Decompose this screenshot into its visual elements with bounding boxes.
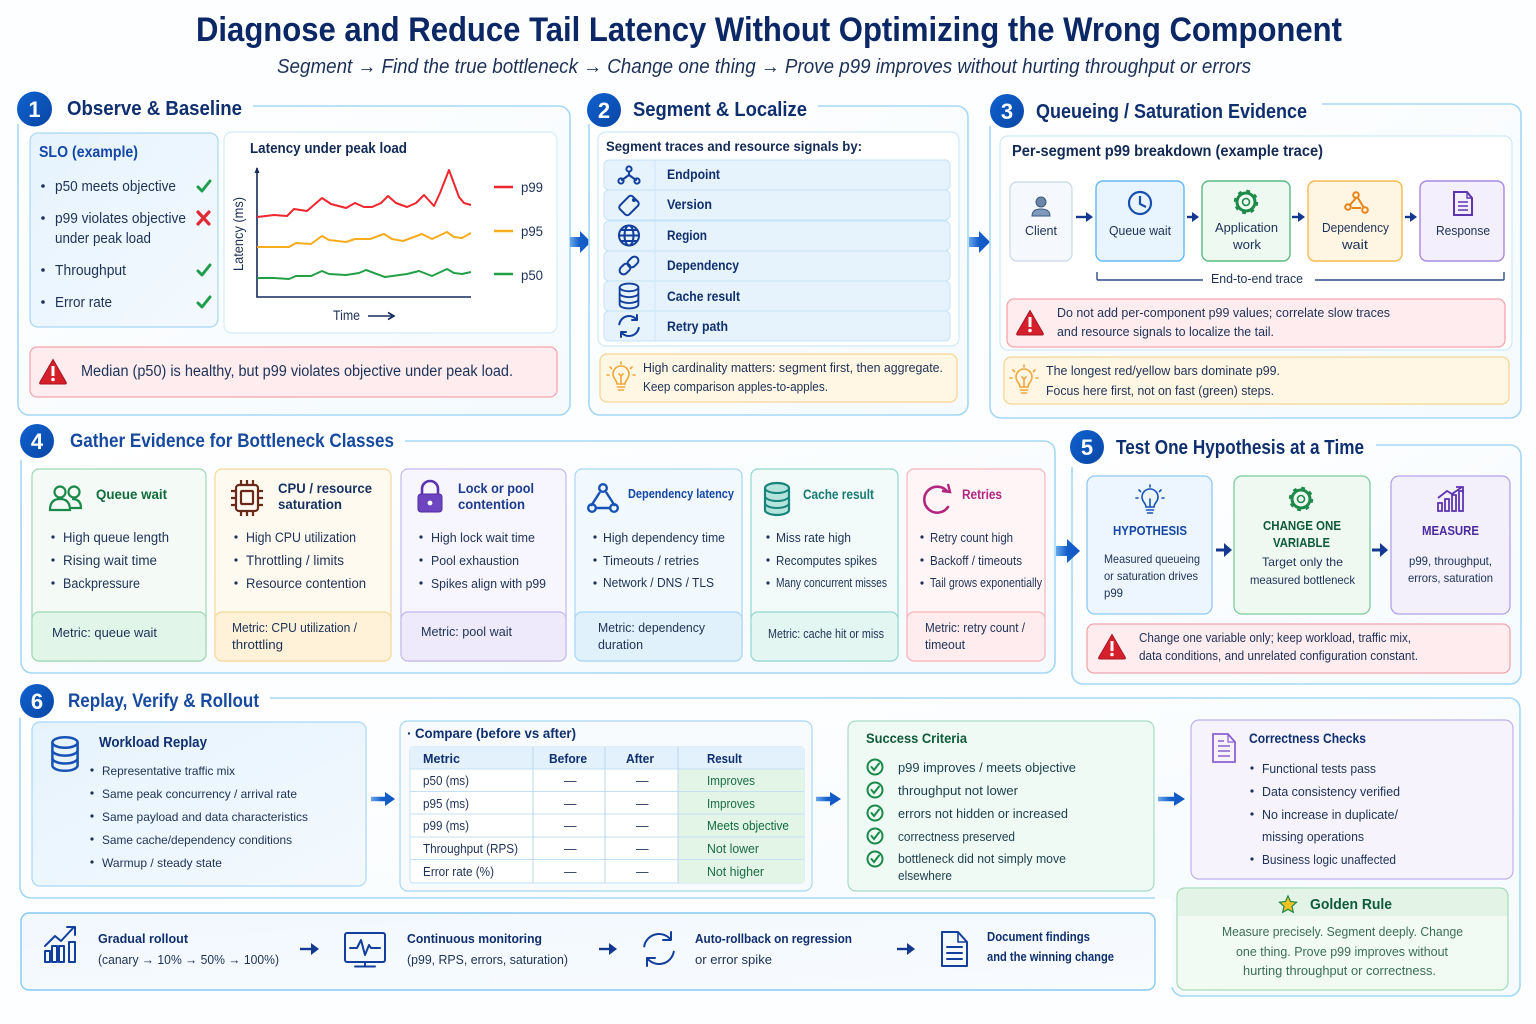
bracket: end-to-end trace: End-to-end trace — [1211, 271, 1303, 286]
card: correctness checks — [1191, 720, 1513, 879]
line chart: latency under peak load — [224, 132, 557, 333]
compare table — [400, 721, 812, 891]
card: success criteria: bottleneck did not simply move — [898, 851, 1066, 866]
card: workload replay: Same cache/dependency conditions — [102, 833, 292, 847]
compare table: · — [407, 725, 412, 741]
card: queue wait: Queue wait — [96, 487, 167, 502]
badge 5 — [1070, 430, 1104, 464]
card: correctness checks: missing operations — [1262, 830, 1364, 844]
card: lock or pool contention: contention — [458, 497, 525, 512]
segmentation table — [598, 132, 959, 346]
card: cache result: Recomputes spikes — [776, 554, 877, 568]
card: correctness checks: Correctness Checks — [1249, 730, 1366, 746]
card: retries — [907, 469, 1045, 661]
compare table: — — [636, 865, 649, 879]
card: measure: p99, throughput, — [1409, 554, 1492, 568]
tip: high cardinality: Keep comparison apples-to-apples. — [643, 379, 828, 394]
card: queue wait: Metric: queue wait — [52, 625, 157, 640]
card: success criteria: throughput not lower — [898, 783, 1019, 798]
step: client — [1010, 182, 1072, 261]
compare table: p50 (ms) — [423, 774, 469, 788]
step: dependency wait — [1308, 181, 1402, 261]
compare table: Not lower — [707, 842, 759, 856]
compare table: Compare (before vs after) — [415, 725, 576, 741]
alert: median healthy: Median (p50) is healthy, but p99 violates objective under peak load. — [81, 363, 513, 380]
card: measure: MEASURE — [1422, 523, 1479, 538]
heading: segment and localize: Segment & Localize — [633, 99, 807, 121]
alert: change one variable only: Change one variable only; keep workload, traffic mix, — [1139, 631, 1411, 645]
subtitle: Segment → Find the true bottleneck → Change one thing → Prove p99 improves without hurting throughput or errors — [277, 56, 1251, 78]
card: queue wait: High queue length — [63, 530, 169, 545]
step: queue wait: Queue wait — [1109, 223, 1171, 238]
panel: 3 queueing and saturation evidence — [990, 94, 1521, 418]
panel: 5 test one hypothesis — [1070, 430, 1521, 684]
row: retry path — [604, 311, 950, 341]
step: continuous monitoring: (p99, RPS, errors, saturation) — [407, 952, 568, 967]
badge 3: 3 — [1001, 99, 1013, 124]
card: dependency latency: High dependency time — [603, 530, 725, 545]
card: golden rule — [1177, 888, 1508, 990]
step: auto-rollback: Auto-rollback on regression — [695, 931, 852, 946]
compare table: — — [636, 842, 649, 856]
segmentation table: Segment traces and resource signals by: — [606, 138, 862, 154]
card: queue wait — [32, 469, 206, 661]
card: queue wait: Backpressure — [63, 576, 140, 591]
step: gradual rollout: (canary → 10% → 50% → 100%) — [98, 952, 279, 967]
card: cpu saturation: Metric: CPU utilization / — [232, 620, 357, 635]
step: document findings — [942, 929, 1114, 966]
step: continuous monitoring: Continuous monitoring — [407, 931, 542, 946]
SLO card: p50 meets objective — [55, 179, 176, 195]
row: endpoint: Endpoint — [667, 167, 720, 182]
card: cache result: Metric: cache hit or miss — [768, 627, 884, 641]
row: cache result: Cache result — [667, 289, 740, 304]
step: client: Client — [1025, 223, 1057, 238]
SLO card: Error rate — [55, 295, 112, 311]
card: workload replay: Warmup / steady state — [102, 856, 222, 870]
card: workload replay: Same peak concurrency / arrival rate — [102, 787, 297, 801]
compare table: p99 (ms) — [423, 819, 469, 833]
heading: observe and baseline: Observe & Baseline — [67, 98, 242, 120]
compare table: — — [564, 819, 577, 833]
card: change one variable — [1234, 476, 1370, 614]
trace breakdown: Per-segment p99 breakdown (example trace) — [1012, 143, 1323, 160]
line chart: latency under peak load: p50 — [521, 267, 543, 283]
compare table: — — [564, 842, 577, 856]
card: success criteria: p99 improves / meets objective — [898, 760, 1076, 775]
SLO card: Throughput — [55, 263, 126, 279]
card: retries: Metric: retry count / — [925, 620, 1025, 635]
badge 5: 5 — [1081, 435, 1093, 460]
rollout bar — [21, 913, 1155, 990]
card: retries: Tail grows exponentially — [930, 576, 1043, 590]
panel: 2 segment and localize — [587, 93, 968, 415]
badge 6 — [20, 684, 54, 718]
trace breakdown — [1000, 136, 1512, 350]
heading: queueing and saturation: Queueing / Saturation Evidence — [1036, 101, 1307, 123]
card: cache result — [751, 469, 898, 661]
panel: 4 gather evidence — [20, 424, 1055, 673]
card: dependency latency — [575, 469, 742, 661]
arrow: step 4 to 5 — [1056, 539, 1080, 563]
card: dependency latency: Network / DNS / TLS — [603, 575, 714, 590]
card: dependency latency: Dependency latency — [628, 487, 734, 501]
compare table: Metric — [423, 752, 460, 766]
row: region: Region — [667, 228, 707, 243]
card: cpu saturation: saturation — [278, 497, 342, 512]
card: golden rule: hurting throughput or correctness. — [1243, 963, 1436, 978]
step: gradual rollout: Gradual rollout — [98, 931, 189, 946]
row: dependency — [604, 251, 950, 281]
card: change one variable: CHANGE ONE — [1263, 518, 1341, 533]
arrow: compare to success — [816, 792, 841, 806]
card: workload replay: Workload Replay — [99, 735, 207, 751]
card: retries: Backoff / timeouts — [930, 554, 1022, 568]
step: gradual rollout — [45, 927, 279, 967]
compare table: — — [564, 797, 577, 811]
tip: high cardinality — [600, 354, 957, 402]
tip: longest bars — [1004, 357, 1509, 404]
alert: do not add p99: Do not add per-component p99 values; correlate slow traces — [1057, 305, 1390, 320]
compare table: — — [564, 774, 577, 788]
card: change one variable: measured bottleneck — [1250, 573, 1356, 587]
line chart: latency under peak load: p95 — [521, 223, 543, 239]
compare table: — — [636, 819, 649, 833]
card: lock or pool contention: Pool exhaustion — [431, 553, 519, 568]
badge 3 — [990, 94, 1024, 128]
step: continuous monitoring — [345, 931, 568, 967]
step: response — [1420, 181, 1504, 261]
tip: high cardinality: High cardinality matters: segment first, then aggregate. — [643, 360, 943, 375]
card: workload replay: Same payload and data characteristics — [102, 810, 308, 824]
card: cache result: Cache result — [803, 487, 874, 502]
alert: do not add p99 — [1007, 299, 1505, 347]
row: dependency: Dependency — [667, 258, 739, 273]
card: cache result: Miss rate high — [776, 531, 851, 545]
card: change one variable: Target only the — [1262, 555, 1343, 569]
card: cpu saturation — [215, 469, 391, 661]
step: dependency wait: Dependency — [1322, 220, 1389, 235]
arrow: step 1 to 2 — [570, 231, 591, 253]
line chart: latency under peak load: Latency under peak load — [250, 141, 407, 157]
step: auto-rollback: or error spike — [695, 952, 772, 967]
line chart: latency under peak load: Time — [333, 307, 360, 323]
arrow: rollout to monitoring — [300, 943, 319, 955]
card: correctness checks: Data consistency verified — [1262, 785, 1400, 799]
card: hypothesis: or saturation drives — [1104, 569, 1198, 583]
badge 6: 6 — [31, 689, 43, 714]
step: document findings: and the winning change — [987, 949, 1114, 964]
compare table: Throughput (RPS) — [423, 842, 518, 856]
card: success criteria: correctness preserved — [898, 829, 1015, 844]
step: application work: Application — [1215, 220, 1278, 235]
panel: 6 replay verify and rollout — [20, 684, 1520, 996]
card: correctness checks: Business logic unaffected — [1262, 853, 1396, 867]
tip: longest bars: The longest red/yellow bars dominate p99. — [1046, 363, 1280, 378]
heading: test one hypothesis: Test One Hypothesis at a Time — [1116, 437, 1364, 459]
card: dependency latency: duration — [598, 637, 643, 652]
card: success criteria: Success Criteria — [866, 730, 967, 746]
alert: median healthy — [30, 347, 557, 397]
compare table: p95 (ms) — [423, 797, 469, 811]
compare table: Improves — [707, 797, 755, 811]
card: golden rule: one thing. Prove p99 improves without — [1236, 944, 1448, 959]
compare table: Result — [707, 752, 743, 766]
badge 4 — [20, 424, 54, 458]
card: hypothesis: Measured queueing — [1104, 552, 1200, 566]
row: endpoint — [604, 160, 950, 190]
badge 1: 1 — [28, 97, 41, 122]
arrows between steps — [1076, 212, 1417, 222]
alert: change one variable only — [1087, 624, 1510, 673]
card: lock or pool contention: High lock wait time — [431, 530, 535, 545]
step: dependency wait: wait — [1341, 237, 1368, 252]
card: retries: timeout — [925, 637, 965, 652]
line chart: latency under peak load: p99 — [521, 179, 543, 195]
card: change one variable: VARIABLE — [1273, 535, 1330, 550]
card: workload replay — [32, 722, 366, 886]
card: success criteria: elsewhere — [898, 868, 952, 883]
heading: replay verify rollout: Replay, Verify & Rollout — [68, 691, 260, 712]
step: response: Response — [1436, 223, 1490, 238]
compare table: — — [636, 774, 649, 788]
SLO card: SLO (example) — [39, 144, 138, 161]
compare table: — — [564, 865, 577, 879]
row: retry path: Retry path — [667, 319, 728, 334]
row: cache result — [604, 281, 950, 311]
bracket: end-to-end trace — [1097, 271, 1504, 286]
compare table: Not higher — [707, 865, 764, 879]
compare table: — — [636, 797, 649, 811]
badge 2: 2 — [598, 98, 610, 123]
arrow: replay to compare — [371, 792, 395, 806]
card: golden rule: Golden Rule — [1310, 896, 1392, 913]
alert: change one variable only: data conditions, and unrelated configuration constant. — [1139, 649, 1418, 663]
step: queue wait — [1096, 181, 1184, 261]
arrow: rollback to documentation — [897, 943, 915, 955]
compare table: Before — [549, 752, 587, 766]
row: version: Version — [667, 197, 712, 212]
card: lock or pool contention — [401, 469, 566, 661]
card: cpu saturation: CPU / resource — [278, 481, 372, 496]
card: success criteria: errors not hidden or increased — [898, 806, 1068, 821]
tip: longest bars: Focus here first, not on fast (green) steps. — [1046, 383, 1274, 398]
card: cpu saturation: High CPU utilization — [246, 530, 356, 545]
arrow: monitoring to rollback — [599, 943, 617, 955]
SLO card: p99 violates objective — [55, 211, 186, 227]
card: correctness checks: Functional tests pass — [1262, 762, 1376, 776]
card: dependency latency: Metric: dependency — [598, 620, 705, 635]
card: cpu saturation: Resource contention — [246, 576, 366, 591]
arrows between hypothesis steps — [1216, 543, 1388, 557]
card: lock or pool contention: Spikes align with p99 — [431, 576, 546, 591]
step: application work: work — [1232, 237, 1262, 252]
card: success criteria — [848, 721, 1154, 891]
compare table: After — [626, 752, 654, 766]
arrow: step 2 to 3 — [969, 231, 990, 253]
card: lock or pool contention: Lock or pool — [458, 481, 534, 496]
card: measure — [1391, 476, 1510, 614]
row: region — [604, 221, 950, 251]
compare table: Meets objective — [707, 819, 789, 833]
badge 1 — [17, 92, 52, 126]
card: cpu saturation: throttling — [232, 637, 283, 652]
card: hypothesis: p99 — [1104, 586, 1123, 600]
badge 4: 4 — [31, 429, 44, 454]
card: queue wait: Rising wait time — [63, 553, 157, 568]
compare table: Improves — [707, 774, 755, 788]
line chart: latency under peak load: Latency (ms) — [230, 197, 246, 271]
title: Diagnose and Reduce Tail Latency Without Optimizing the Wrong Component — [196, 11, 1342, 49]
SLO card: under peak load — [55, 231, 151, 247]
card: cache result: Many concurrent misses — [776, 576, 887, 590]
SLO card — [30, 133, 218, 327]
card: dependency latency: Timeouts / retries — [603, 553, 699, 568]
card: lock or pool contention: Metric: pool wait — [421, 624, 512, 639]
card: hypothesis — [1087, 476, 1212, 614]
step: application work — [1202, 181, 1290, 261]
badge 2 — [587, 93, 621, 127]
card: golden rule: Measure precisely. Segment deeply. Change — [1222, 924, 1463, 939]
compare table: Error rate (%) — [423, 865, 494, 879]
arrow: success to correctness — [1158, 792, 1185, 806]
panel: 1 observe and baseline — [17, 92, 570, 415]
card: cpu saturation: Throttling / limits — [246, 553, 344, 568]
card: hypothesis: HYPOTHESIS — [1113, 523, 1187, 538]
heading: gather evidence: Gather Evidence for Bottleneck Classes — [70, 431, 394, 452]
card: workload replay: Representative traffic mix — [102, 764, 235, 778]
card: measure: errors, saturation — [1408, 571, 1493, 585]
card: correctness checks: No increase in duplicate/ — [1262, 808, 1399, 822]
alert: do not add p99: and resource signals to localize the tail. — [1057, 324, 1274, 339]
step: auto-rollback — [644, 931, 852, 967]
card: retries: Retry count high — [930, 531, 1013, 545]
row: version — [604, 190, 950, 220]
card: retries: Retries — [962, 487, 1002, 502]
step: document findings: Document findings — [987, 929, 1090, 944]
